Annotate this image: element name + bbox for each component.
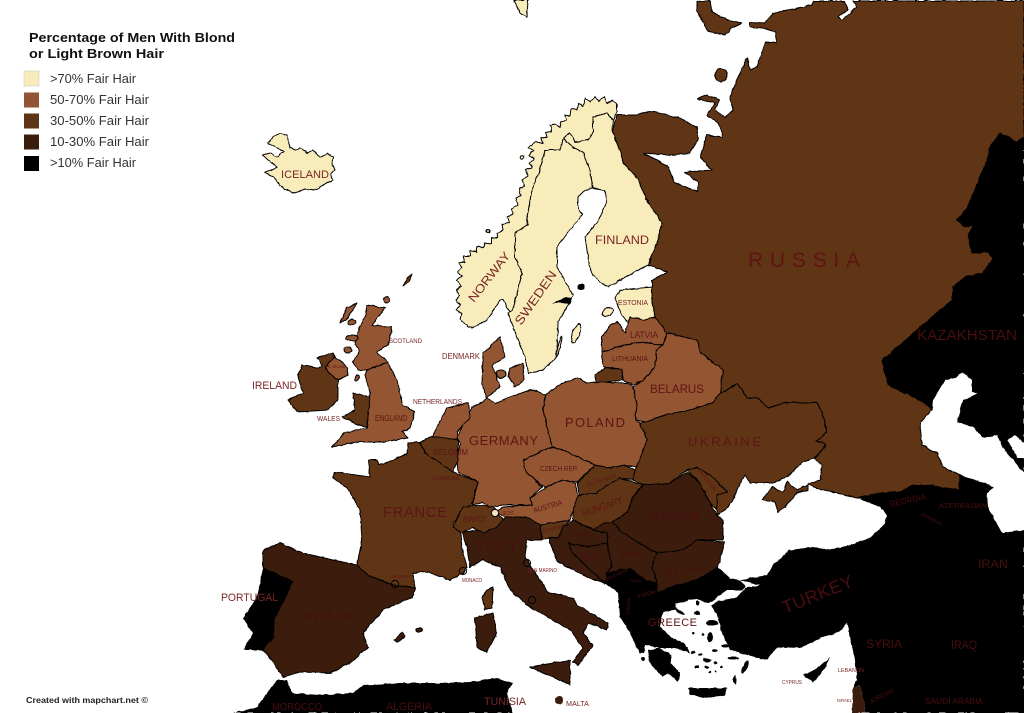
Iceland: [263, 133, 335, 193]
Bulgaria: [652, 540, 725, 593]
Faroes: [403, 274, 412, 286]
Estonia label: ESTONIA: [618, 298, 648, 307]
San Marino label: SAN MARINO: [528, 568, 558, 574]
Ireland: [288, 353, 338, 412]
Novaya Zemlya: [697, 1, 742, 35]
Stockholm archipelago: [552, 297, 572, 304]
Slovakia label: SLOVAKIA: [585, 472, 618, 489]
Portugal: [243, 568, 293, 650]
Germany: [457, 390, 552, 507]
Iran label: IRAN: [978, 557, 1008, 571]
Bulgaria label: BULGARIA: [664, 564, 706, 578]
legend title: Percentage of Men With Blond: [29, 30, 235, 45]
Norway: [456, 97, 617, 328]
Cyprus label: CYPRUS: [782, 680, 803, 686]
Portugal label: PORTUGAL: [221, 592, 278, 604]
Austria label: AUSTRIA: [532, 498, 563, 515]
Scotland: [353, 305, 392, 370]
Kosovo label: KOSOVO: [630, 579, 641, 583]
North Africa: [233, 678, 513, 713]
Poland: [543, 378, 647, 468]
Saudi Arabia label: SAUDI ARABIA: [925, 697, 984, 706]
Cyprus: [803, 657, 830, 682]
Armenia label: ARMENIA: [919, 511, 944, 528]
Poland label: POLAND: [565, 415, 625, 430]
Montenegro label: MONTENEGRO: [604, 567, 629, 582]
Monaco label: MONACO: [462, 578, 483, 584]
Wales: [342, 393, 370, 427]
legend item: under 10: >10% Fair Hair: [50, 156, 136, 170]
Luxemburg label: LUXEMBURG: [432, 476, 459, 482]
Estonian islands: [601, 306, 615, 318]
England: [332, 362, 415, 447]
Ireland label: IRELAND: [252, 380, 297, 392]
Czech Republic label: CZECH REP.: [540, 464, 578, 473]
Russia: [612, 1, 1024, 498]
Kolguev: [715, 68, 727, 82]
Denmark label: DENMARK: [442, 352, 481, 361]
Sweden label: SWEDEN: [512, 268, 560, 328]
Moldova: [687, 467, 727, 510]
Austria: [497, 480, 578, 525]
Netherlands: [432, 403, 470, 440]
Kaliningrad: [595, 368, 623, 383]
Denmark: [482, 337, 505, 398]
legend item: 30-50: 30-50% Fair Hair: [50, 114, 149, 128]
France: [333, 442, 478, 588]
Belarus label: BELARUS: [650, 384, 704, 396]
Andorra label: ANDORRA: [390, 574, 411, 580]
Sicily: [530, 660, 570, 685]
Morocco label: MOROCCO: [272, 702, 322, 713]
legend item: over 70: [24, 71, 136, 86]
Corsica: [482, 587, 493, 610]
Romania: [612, 472, 723, 553]
FYROM label: FYROM: [637, 589, 656, 600]
Latvia label: LATVIA: [630, 330, 658, 340]
legend item: under 10: [24, 156, 136, 171]
Wales label: WALES: [317, 414, 340, 423]
Belgium label: BELGIUM: [433, 447, 468, 457]
legend item: 10-30: 10-30% Fair Hair: [50, 135, 149, 149]
sea: Caspian: [920, 372, 1024, 533]
Crete: [688, 688, 727, 698]
Liechtenstein label: LIECHT: [501, 511, 514, 517]
Belgium: [420, 437, 458, 472]
Northern Ireland: [325, 357, 348, 380]
France label: FRANCE: [383, 504, 447, 521]
Hebrides and Orkney: [340, 297, 390, 353]
Slovenia label: SLOVENIA: [542, 524, 565, 535]
Malta label: MALTA: [566, 699, 589, 708]
Peloponnese: [648, 648, 680, 682]
sea: Aral: [1008, 435, 1024, 458]
Iceland label: ICELAND: [281, 169, 329, 181]
legend title: or Light Brown Hair: [29, 46, 164, 61]
country labels: [221, 169, 1017, 713]
Finland label: FINLAND: [595, 233, 649, 247]
Kazakhstan label: KAZAKHSTAN: [917, 328, 1017, 344]
credit: Created with mapchart.net ©: [26, 696, 148, 705]
Estonia: [615, 287, 655, 323]
Aegean and Ionian islands: [630, 601, 750, 685]
Russia label: RUSSIA: [748, 249, 860, 272]
Italy: [462, 517, 608, 665]
Israel label: ISRAEL: [837, 698, 852, 704]
Croatia label: CROATIA: [570, 533, 594, 539]
Czech Republic: [523, 447, 595, 488]
Spain label: SPAIN: [303, 609, 352, 624]
Bosnia label: BIH: [583, 553, 602, 564]
Croatia: [550, 520, 607, 583]
Bosnia: [568, 543, 612, 583]
Lebanon label: LEBANON: [838, 668, 864, 674]
legend title: [29, 30, 235, 61]
Hungary label: HUNGARY: [581, 495, 625, 520]
Sardinia: [475, 613, 497, 652]
Isle of Man: [354, 374, 360, 382]
Spain: [263, 543, 415, 677]
Sweden: [508, 138, 593, 373]
Danish islands: [496, 363, 524, 387]
Belarus: [633, 333, 723, 422]
Turkey label: TURKEY: [779, 571, 856, 618]
Greece and southern Balkans: [605, 567, 745, 654]
Netherlands label: NETHERLANDS: [413, 397, 462, 406]
Norwegian islets: [486, 155, 524, 232]
legend: [24, 30, 235, 171]
Northern Ireland label: N. IRELAND: [328, 365, 345, 369]
Balearic Islands: [394, 628, 422, 642]
Latvia: [602, 317, 667, 352]
Georgia label: GEORGIA: [888, 491, 927, 509]
Finland: [563, 113, 662, 287]
England label: ENGLAND: [375, 414, 407, 423]
Lithuania: [602, 342, 663, 385]
Italy label: ITALY: [478, 538, 517, 553]
Jordan label: JORDAN: [869, 687, 895, 706]
Ukraine: [633, 384, 827, 515]
Albania label: ALBANIA: [625, 597, 632, 615]
Svalbard: [514, 0, 528, 17]
Switzerland: [453, 505, 503, 533]
Switzerland label: SWITZ.: [463, 515, 487, 524]
microstate markers: [391, 509, 536, 604]
Serbia label: SERBIA: [620, 550, 645, 559]
Malta: [555, 696, 563, 704]
Swedish islands: [555, 322, 583, 358]
Vatican label: VATICAN CITY: [537, 603, 568, 609]
Scotland label: SCOTLAND: [389, 338, 422, 345]
Azerbaijan label: AZERBAIJAN: [939, 501, 987, 510]
Romania label: ROMANIA: [647, 510, 700, 524]
Moldova label: MOLDOVA: [696, 469, 717, 493]
Hungary: [573, 478, 643, 530]
Lithuania label: LITHUANIA: [612, 354, 648, 363]
Crimea: [762, 481, 808, 512]
Ukraine label: UKRAINE: [688, 434, 761, 449]
Syria label: SYRIA: [866, 637, 902, 651]
map of Europe: [233, 0, 1024, 713]
Iraq label: IRAQ: [951, 638, 977, 652]
Serbia: [593, 522, 657, 583]
legend item: 50-70: 50-70% Fair Hair: [50, 93, 149, 107]
Slovakia: [577, 465, 635, 497]
region: black Asia and Turkey: [711, 130, 1024, 713]
Algeria label: ALGERIA: [386, 701, 433, 713]
Slovenia: [540, 520, 570, 540]
Germany label: GERMANY: [469, 433, 538, 448]
Israel: [852, 685, 866, 713]
Greece label: GREECE: [648, 617, 697, 629]
Norway label: NORWAY: [465, 249, 513, 305]
legend item: over 70: >70% Fair Hair: [50, 72, 136, 86]
Tunisia label: TUNISIA: [484, 696, 527, 708]
Aland: [578, 284, 584, 290]
